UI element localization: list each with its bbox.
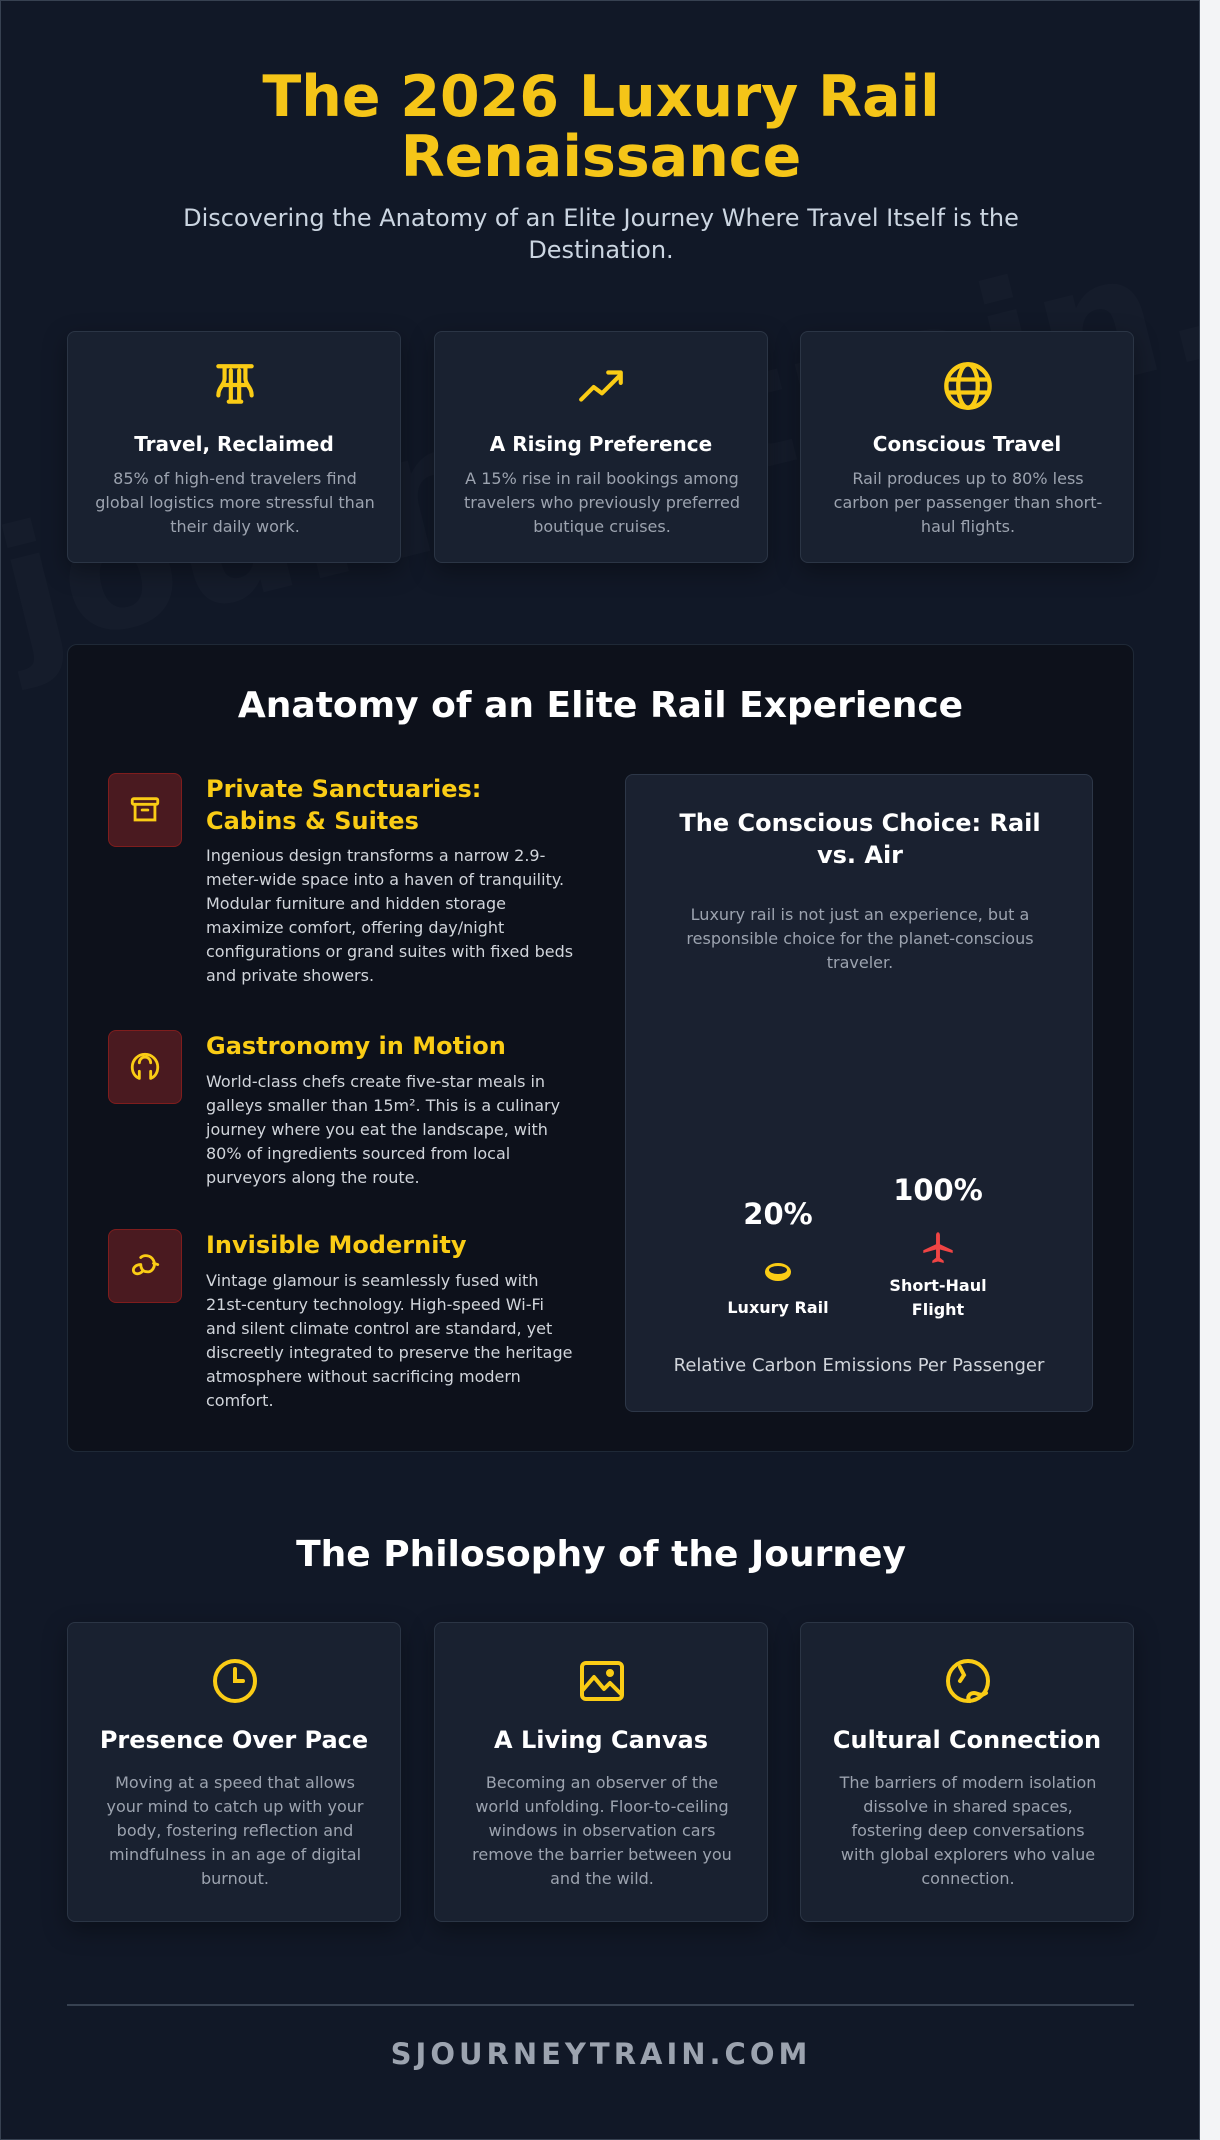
title: [262, 64, 940, 190]
icon: pillar: [216, 364, 254, 404]
column: luxury rail: [727, 1197, 829, 1317]
icon: clock: [213, 1659, 257, 1703]
stat card: travel reclaimed: 85% of high-end travelers find global logistics more stressful than their daily work.: [95, 469, 375, 536]
card: cultural connection: The barriers of modern isolation dissolve in shared spaces, fostering deep conversations with global explorers who value connection.: [840, 1773, 1096, 1888]
stat card: conscious travel: Conscious Travel: [873, 432, 1061, 456]
item: private sanctuaries: Cabins & Suites: [206, 807, 419, 835]
heading: anatomy: Anatomy of an Elite Rail Experience: [238, 685, 963, 726]
item: invisible modernity: Invisible Modernity: [206, 1231, 467, 1259]
panel: anatomy: [67, 644, 1134, 1452]
stat card: rising preference: [434, 331, 768, 563]
card: cultural connection: [800, 1622, 1134, 1922]
icon: globe hands: [946, 1659, 990, 1704]
heading: conscious choice: The Conscious Choice: Rail vs. Air: [679, 809, 1041, 869]
stat card: travel reclaimed: [67, 331, 401, 563]
stat card: conscious travel: Rail produces up to 80% less carbon per passenger than short-haul flights.: [834, 469, 1102, 536]
stat card: rising preference: A 15% rise in rail bookings among travelers who previously preferred boutique cruises.: [464, 469, 740, 536]
card: living canvas: Becoming an observer of the world unfolding. Floor-to-ceiling windows in observation cars remove the barrier between you and the wild.: [472, 1773, 732, 1888]
caption: chart: Relative Carbon Emissions Per Passenger: [674, 1355, 1044, 1376]
icon: globe: [944, 362, 992, 410]
column: short-haul flight: Flight: [912, 1300, 964, 1319]
card: presence over pace: [67, 1622, 401, 1922]
text: chart description: Luxury rail is not just an experience, but a responsible choice for the planet-conscious traveler.: [686, 905, 1034, 972]
chart: emissions: [727, 1173, 987, 1319]
card: cultural connection: Cultural Connection: [833, 1726, 1101, 1754]
card: presence over pace: Presence Over Pace: [100, 1726, 368, 1754]
item: gastronomy: [108, 1030, 560, 1187]
column: luxury rail: Luxury Rail: [727, 1298, 829, 1317]
icon: image: [580, 1661, 624, 1701]
card: living canvas: A Living Canvas: [494, 1726, 708, 1754]
item: invisible modernity: [108, 1229, 572, 1410]
stat card: rising preference: A Rising Preference: [490, 432, 712, 456]
column: short-haul flight: 100%: [893, 1173, 983, 1207]
item: private sanctuaries: [108, 773, 573, 985]
item: gastronomy: Gastronomy in Motion: [206, 1032, 506, 1060]
subtitle: Discovering the Anatomy of an Elite Journey Where Travel Itself is the Destination.: [183, 204, 1019, 264]
column: short-haul flight: [889, 1173, 987, 1319]
title: The 2026 Luxury Rail: [262, 64, 940, 130]
icon: archive box: [108, 773, 182, 847]
icon: rail: [765, 1263, 791, 1281]
icon: plane: [923, 1232, 953, 1263]
card: presence over pace: Moving at a speed that allows your mind to catch up with your body, fostering reflection and mindfulness in an age of digital burnout.: [107, 1773, 363, 1888]
item: gastronomy: World-class chefs create five-star meals in galleys smaller than 15m². This is a culinary journey where you eat the landscape, with 80% of ingredients sourced from local purveyors along the route.: [206, 1072, 560, 1187]
panel: rail vs air: [625, 774, 1093, 1412]
item: private sanctuaries: Private Sanctuaries:: [206, 775, 481, 803]
stat card: travel reclaimed: Travel, Reclaimed: [134, 432, 334, 456]
card: living canvas: [434, 1622, 768, 1922]
icon: chef: [108, 1030, 182, 1104]
item: invisible modernity: Vintage glamour is seamlessly fused with 21st-century technology. High-speed Wi-Fi and silent climate control are standard, yet discreetly integrated to preserve the heritage atmosphere without sacrificing modern comfort.: [206, 1271, 572, 1410]
icon: sparkle: [108, 1229, 182, 1303]
footer: site name: SJOURNEYTRAIN.COM: [391, 2037, 811, 2071]
column: short-haul flight: Short-Haul: [889, 1276, 987, 1295]
column: luxury rail: 20%: [743, 1197, 813, 1231]
title: Renaissance: [401, 124, 801, 190]
stat card: conscious travel: [800, 331, 1134, 563]
item: private sanctuaries: Ingenious design transforms a narrow 2.9-meter-wide space into a haven of tranquility. Modular furniture and hidden storage maximize comfort, offering day/night configurations or grand suites with fixed beds and private showers.: [206, 846, 573, 985]
heading: philosophy: The Philosophy of the Journey: [296, 1534, 906, 1575]
icon: trend arrow: [579, 370, 623, 402]
